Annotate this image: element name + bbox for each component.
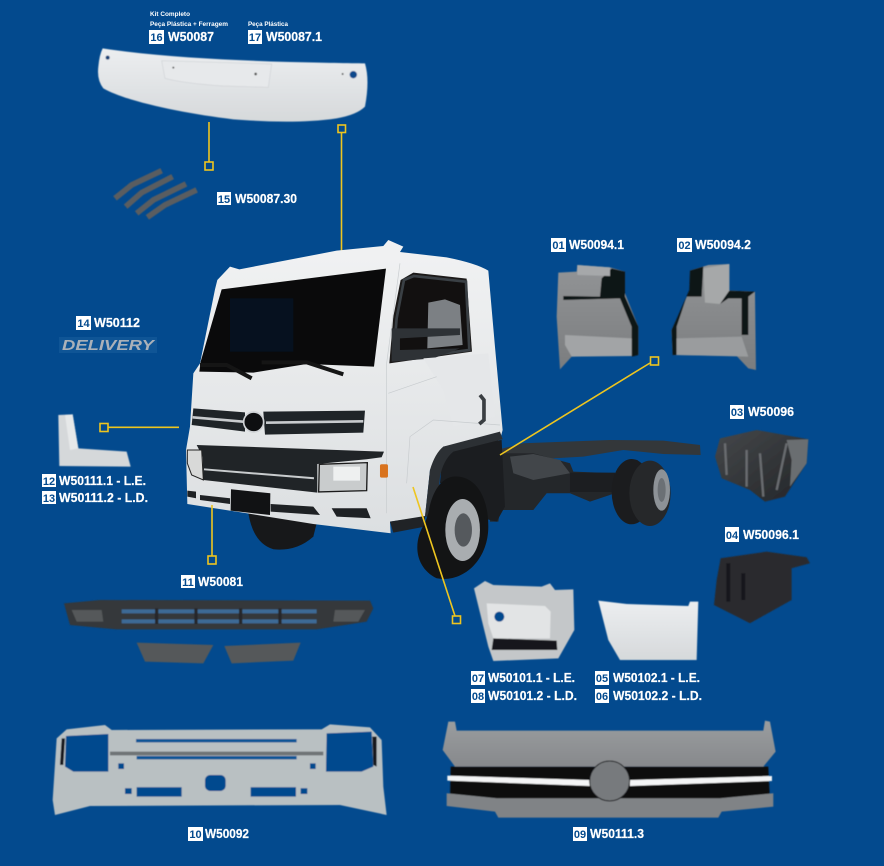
label: 02: W50094.2: [695, 237, 751, 252]
label: 07: W50101.1 - L.E.: [488, 670, 575, 685]
truck chassis and rear wheels: [490, 440, 701, 526]
delivery emblem: DELIVERY: [62, 338, 156, 354]
wipers: [200, 362, 343, 378]
part: brackets: [115, 171, 197, 217]
label: 11: 11: [182, 577, 194, 589]
label: 01: 01: [552, 240, 565, 252]
part: step left: [474, 581, 574, 661]
label: kit completo: [149, 11, 228, 44]
door handle: [479, 395, 484, 424]
label: 14: 14: [77, 318, 90, 330]
connector: visor to brackets: [205, 122, 213, 170]
label: 04: W50096.1: [743, 527, 799, 542]
label: 12: 12: [43, 476, 55, 488]
label: 03: 03: [731, 407, 743, 419]
part: hood and grille: [443, 721, 776, 818]
front axle shadow: [248, 513, 317, 550]
front wheel: [417, 477, 488, 579]
bumper vents: [187, 491, 371, 518]
label: kit completo: Kit Completo: [150, 11, 190, 18]
part: step cover: [598, 601, 698, 660]
delivery emblem: [59, 337, 157, 354]
label: 15: W50087.30: [235, 191, 297, 206]
label: 12: W50111.1 - L.E.: [59, 473, 146, 488]
hub: [445, 499, 480, 561]
label: 07: 07: [472, 673, 484, 685]
windshield reflection: [230, 298, 293, 352]
part: fog covers: [137, 643, 301, 663]
label: 10: [188, 826, 249, 841]
plate: [231, 489, 270, 515]
connector: visor to truck: [338, 125, 346, 256]
wheel arch: [425, 432, 503, 517]
part: lower grille: [64, 600, 373, 629]
door line: [387, 263, 500, 513]
part: fuel tank cover black: [714, 552, 810, 623]
label: 13: W50111.2 - L.D.: [59, 490, 148, 505]
mirror: [427, 299, 463, 348]
connector: corner to truck: [100, 424, 179, 432]
label: 11: [181, 574, 243, 589]
label: peça plástica: Peça Plástica: [248, 21, 288, 28]
headlight right: [319, 463, 367, 492]
connector: bumper to part 11: [208, 505, 216, 564]
label: 11: W50081: [198, 574, 243, 589]
part: fuel tank cover: [715, 430, 808, 502]
label: 05: 05: [596, 673, 608, 685]
wheel arch inner: [440, 440, 505, 522]
label: 03: W50096: [748, 404, 794, 419]
label: 13: 13: [43, 493, 55, 505]
truck: [186, 240, 505, 579]
panel shade: [423, 353, 495, 427]
label: 14: W50112: [94, 315, 140, 330]
label: 08: 08: [472, 691, 484, 703]
lower grille: [197, 445, 384, 493]
lower chrome bar: [204, 469, 314, 478]
label: 05: W50102.1 - L.E.: [613, 670, 700, 685]
step base: [390, 516, 425, 533]
connector: step to truck: [413, 487, 460, 624]
turn signal: [380, 464, 388, 478]
label: 01: W50094.1: [569, 237, 624, 252]
label: 10: W50092: [205, 826, 249, 841]
label: 03: [730, 404, 794, 419]
label: 15: 15: [218, 194, 230, 206]
label: peça plástica: [248, 21, 322, 44]
connector: chassis to mud flaps: [500, 357, 658, 455]
label: 10: 10: [189, 829, 202, 841]
label: 06: W50102.2 - L.D.: [613, 688, 702, 703]
part: sun visor: [98, 48, 367, 122]
part: bumper corner: [58, 414, 131, 467]
label: 08: W50101.2 - L.D.: [488, 688, 577, 703]
label: 09: 09: [574, 829, 586, 841]
label: kit completo: Peça Plástica + Ferragem: [150, 21, 228, 28]
side window: [389, 273, 472, 363]
headlight left: [187, 450, 203, 480]
label: 02: 02: [678, 240, 691, 252]
label: 04: 04: [726, 530, 739, 542]
label: 06: 06: [596, 691, 608, 703]
part: mud flap left: [557, 265, 638, 369]
label: peça plástica: W50087.1: [266, 29, 322, 44]
part: mud flap right: [672, 264, 756, 370]
mirror arm: [392, 328, 460, 362]
label: 09: W50111.3: [590, 826, 644, 841]
label: kit completo: 16: [150, 32, 163, 44]
label: kit completo: W50087: [168, 29, 214, 44]
upper grille: [192, 408, 365, 435]
part: front panel: [53, 724, 387, 815]
label: peça plástica: 17: [249, 32, 261, 44]
cab body: [186, 240, 503, 533]
vw badge: [244, 412, 264, 432]
upper chrome bar: [193, 417, 363, 423]
windshield: [199, 269, 386, 373]
